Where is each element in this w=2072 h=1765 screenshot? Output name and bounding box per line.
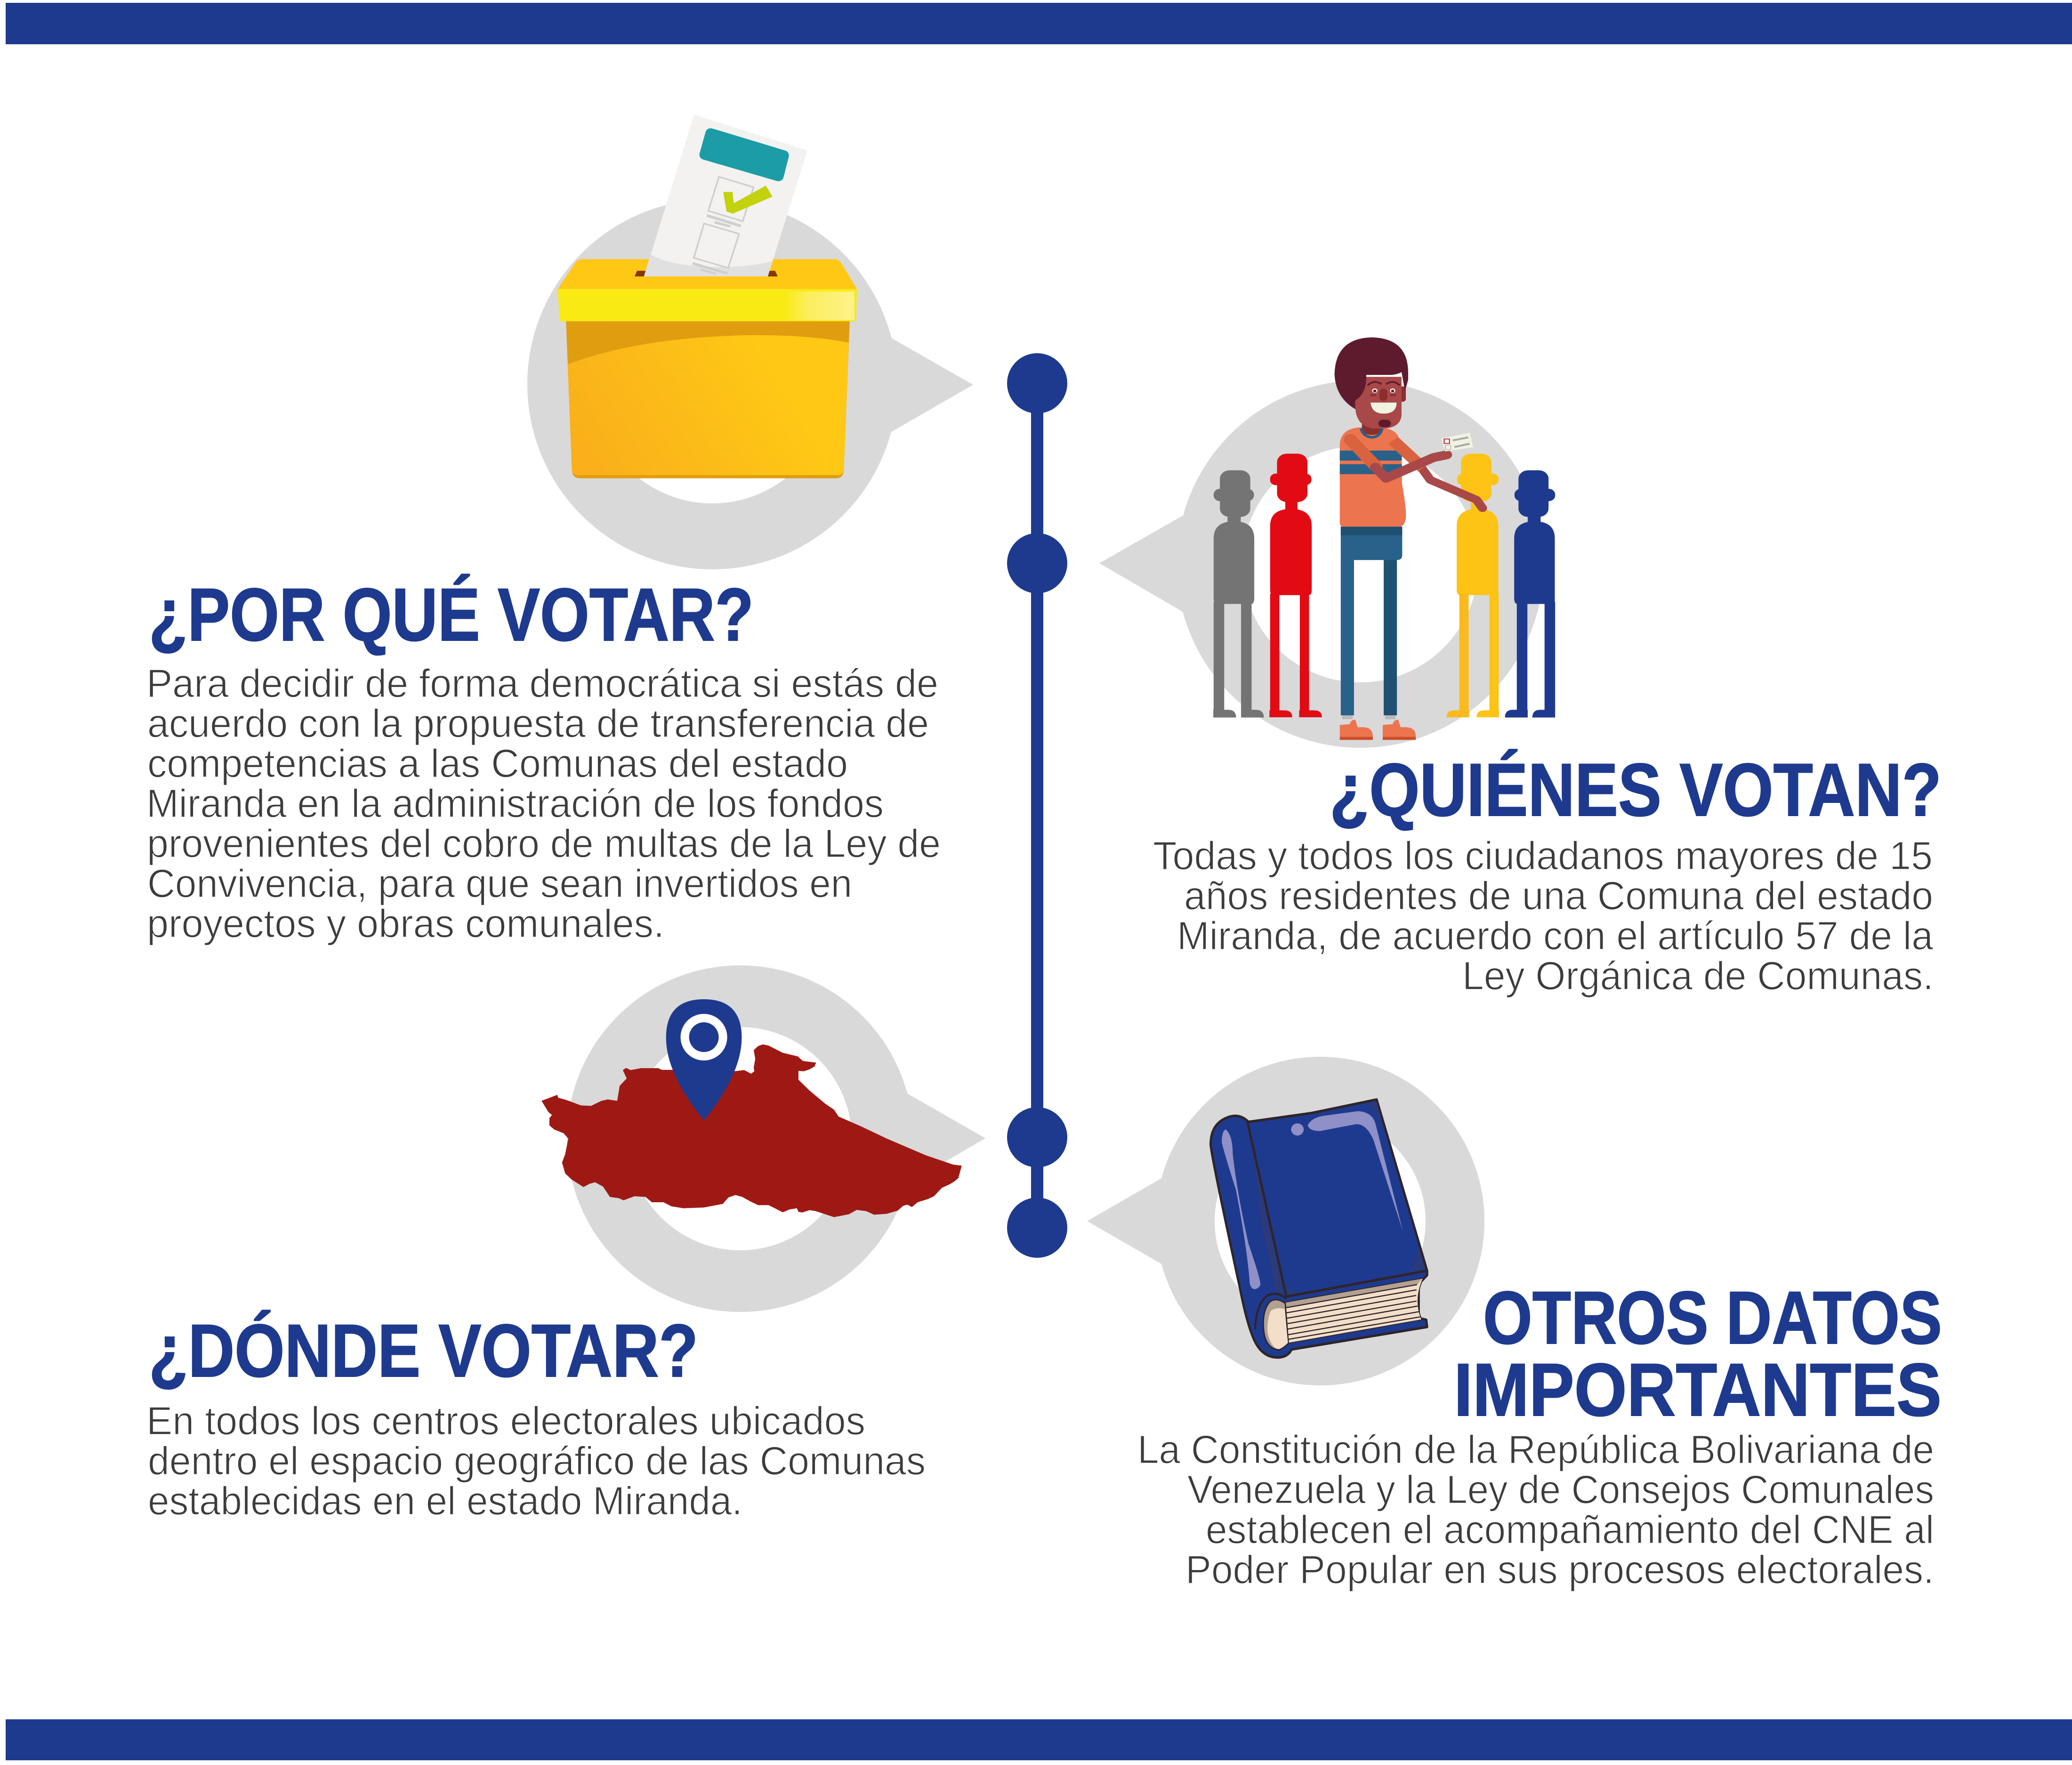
text block: otros datos importantes: Venezuela y la Ley de Consejos Comunales [1187, 1467, 1934, 1512]
text block: por qué votar: Miranda en la administración de los fondos [146, 781, 884, 826]
text block: quiénes votan: años residentes de una Comuna del estado [1184, 874, 1933, 918]
text block: dónde votar: dentro el espacio geográfico de las Comunas [148, 1439, 926, 1483]
text block: otros datos importantes [1137, 1427, 1934, 1592]
text block: por qué votar: provenientes del cobro de multas de la Ley de [147, 821, 941, 866]
heading: quiénes votan: ¿QUIÉNES VOTAN? [1330, 748, 1942, 832]
heading: por qué votar: ¿POR QUÉ VOTAR? [149, 573, 754, 656]
heading: otros datos importantes: OTROS DATOS [1483, 1276, 1942, 1360]
icon: book [1210, 1100, 1427, 1358]
text block: quiénes votan: Todas y todos los ciudadanos mayores de 15 [1153, 834, 1933, 878]
text block: quiénes votan [1153, 834, 1934, 998]
speech ring: otros datos [1087, 1086, 1455, 1356]
text block: dónde votar: establecidas en el estado Miranda. [148, 1479, 742, 1523]
text block: por qué votar [146, 661, 941, 946]
figure: gray [1213, 470, 1264, 718]
text block: quiénes votan: Miranda, de acuerdo con el artículo 57 de la [1177, 914, 1933, 958]
timeline [1007, 353, 1067, 1258]
speech ring: por qué votar [560, 232, 973, 536]
heading: dónde votar: ¿DÓNDE VOTAR? [149, 1309, 698, 1393]
text block: quiénes votan: Ley Orgánica de Comunas. [1462, 954, 1934, 998]
speech ring: dónde votar [598, 996, 985, 1281]
icon: ballot box [558, 115, 857, 478]
icon: Miranda map with location pin [541, 999, 962, 1217]
speech ring: quiénes votan [1099, 413, 1511, 715]
top bar [6, 3, 2072, 44]
text block: dónde votar [146, 1399, 926, 1523]
bottom bar [6, 1719, 2072, 1760]
text block: por qué votar: competencias a las Comunas del estado [147, 741, 848, 785]
text block: otros datos importantes: establecen el acompañamiento del CNE al [1206, 1507, 1934, 1552]
icon: people voting [1213, 337, 1555, 740]
text block: por qué votar: Convivencia, para que sean invertidos en [147, 861, 852, 906]
text block: por qué votar: acuerdo con la propuesta de transferencia de [147, 701, 929, 745]
text block: otros datos importantes: Poder Popular en sus procesos electorales. [1185, 1547, 1934, 1592]
heading: otros datos importantes [1454, 1276, 1942, 1432]
text block: por qué votar: proyectos y obras comunales. [147, 901, 664, 946]
figure: yellow [1446, 453, 1499, 717]
icon: location pin [666, 999, 742, 1120]
figure: man with ballot [1335, 337, 1483, 740]
heading: otros datos importantes: IMPORTANTES [1454, 1348, 1942, 1432]
text block: por qué votar: Para decidir de forma democrática si estás de [146, 661, 938, 705]
map: estado Miranda [541, 1044, 962, 1217]
figure: red [1269, 453, 1322, 717]
text block: dónde votar: En todos los centros electorales ubicados [146, 1399, 865, 1443]
figure: blue [1505, 470, 1555, 718]
text block: otros datos importantes: La Constitución de la República Bolivariana de [1137, 1427, 1934, 1472]
